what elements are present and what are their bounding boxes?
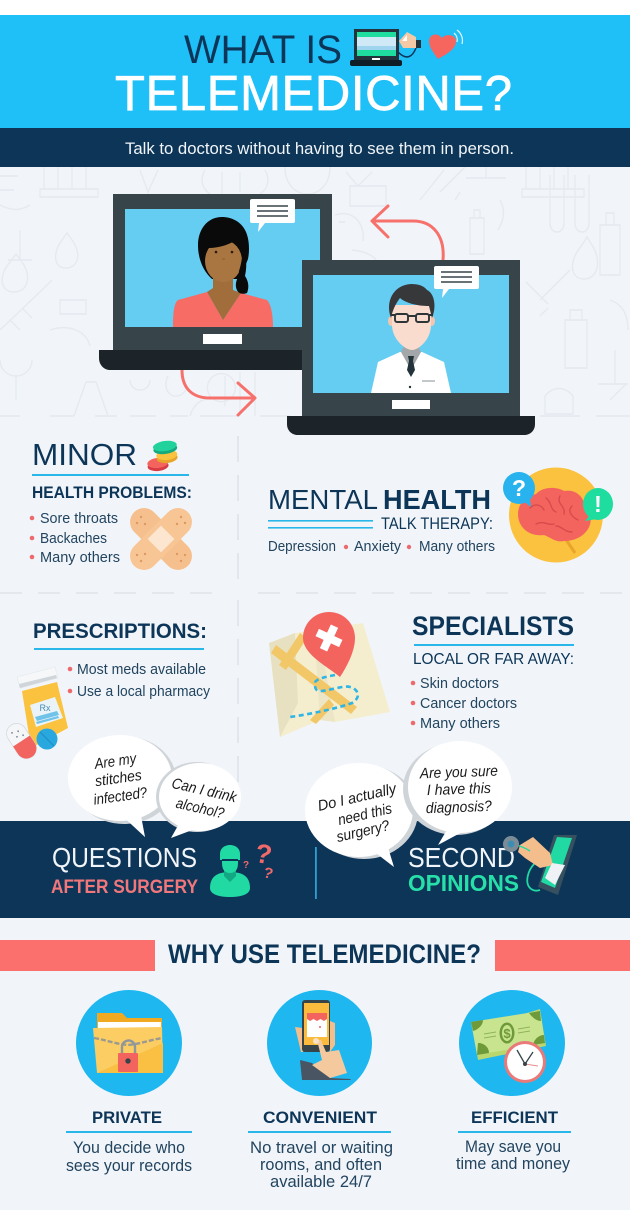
speech bubble: are my stitches infected: Are my (93, 750, 139, 773)
icon: surgeon with question marks: ? (253, 838, 274, 870)
speech bubble: are you sure I have this diagnosis: I have this (427, 780, 492, 799)
text: convenient description: available 24/7 (270, 1173, 372, 1191)
list: specialist types: Skin doctors (420, 675, 499, 692)
speech bubble: doctor (434, 266, 479, 298)
speech bubble: are you sure I have this diagnosis (403, 741, 512, 845)
laptop: doctor (287, 260, 535, 435)
speech bubble: do I actually need this surgery (305, 763, 418, 867)
panel: specialists (269, 611, 574, 737)
icon: hand holding phone (295, 1000, 351, 1080)
panel: private (66, 990, 192, 1175)
icon: pill bottle and pills: Rx (40, 703, 51, 713)
panel: convenient: CONVENIENT (263, 1108, 378, 1127)
icon: brain with question and exclamation: ? (512, 475, 526, 501)
icon: phone with hand and stethoscope (503, 835, 577, 895)
list: minor problems: Sore throats (40, 510, 118, 527)
list: mental health conditions: Many others (419, 539, 495, 555)
speech bubble: are my stitches infected: stitches (94, 767, 143, 790)
icon: surgeon with question marks (210, 838, 275, 897)
icon: brain with question and exclamation: ! (594, 491, 602, 517)
icon: pill bottle and pills (3, 667, 68, 762)
heading: mental health: HEALTH (383, 484, 491, 515)
heading: questions after surgery: AFTER SURGERY (51, 877, 198, 898)
icon: pills (147, 439, 178, 472)
list: mental health conditions (268, 539, 495, 555)
panel: efficient (456, 990, 571, 1173)
laptop: patient (99, 194, 332, 370)
background pattern of medical line icons (0, 162, 630, 416)
speech bubble: are my stitches infected (68, 735, 176, 837)
list: minor problems: Backaches (40, 530, 107, 547)
panel: efficient: EFFICIENT (471, 1108, 559, 1127)
icon: crossed bandages (124, 502, 198, 576)
heading: minor: MINOR (32, 437, 137, 472)
text: efficient description (456, 1138, 571, 1173)
speech bubble: are you sure I have this diagnosis: Are you sure (419, 763, 498, 782)
panel: mental health: TALK THERAPY: (381, 515, 493, 533)
speech bubble: can I drink alcohol (156, 762, 241, 838)
patient portrait (173, 217, 273, 327)
text: convenient description: No travel or waiting (250, 1139, 393, 1157)
panel: prescriptions (3, 620, 210, 762)
subtitle band (0, 128, 630, 167)
laptop video call illustration (99, 194, 535, 435)
text: convenient description: rooms, and often (260, 1156, 382, 1174)
arrow: patient to doctor (182, 370, 255, 415)
list: prescription points: Most meds available (77, 661, 206, 678)
icon: surgeon with question marks: ? (243, 860, 249, 871)
list: minor problems (30, 510, 120, 566)
speech bubble: are you sure I have this diagnosis: diagnosis? (426, 798, 493, 817)
section heading: why use telemedicine (0, 939, 630, 971)
icon: laptop with stethoscope and heart (350, 29, 462, 66)
text: convenient description (250, 1139, 393, 1191)
text: private description (66, 1139, 192, 1175)
text: private description: sees your records (66, 1157, 192, 1175)
list: minor problems: Many others (40, 549, 120, 566)
title: telemedicine: TELEMEDICINE? (115, 67, 512, 121)
text: efficient description: May save you (465, 1138, 561, 1156)
text: efficient description: time and money (456, 1155, 571, 1173)
icon: brain with question and exclamation (503, 468, 613, 562)
title: what is: WHAT IS (184, 28, 342, 72)
speech bubble: do I actually need this surgery: Do I actually (316, 780, 399, 815)
speech bubble: patient (250, 199, 295, 232)
heading: mental health: MENTAL (268, 484, 378, 515)
text: private description: You decide who (73, 1139, 185, 1157)
dark band: questions and second opinions (0, 735, 630, 918)
panel: minor health problems: HEALTH PROBLEMS: (32, 484, 192, 502)
speech bubble: do I actually need this surgery: surgery? (335, 817, 392, 846)
list: specialist types: Cancer doctors (420, 695, 517, 712)
list: prescription points: Use a local pharmacy (77, 683, 210, 700)
doctor portrait (371, 284, 451, 393)
icon: money and clock: $ (503, 1026, 511, 1041)
header band (0, 15, 630, 128)
speech bubble: are my stitches infected: infected? (92, 784, 149, 809)
heading: second opinions: SECOND (408, 842, 515, 873)
heading: second opinions (408, 842, 519, 896)
panel: prescriptions: PRESCRIPTIONS: (33, 620, 207, 643)
panel: minor health problems (30, 437, 198, 576)
icon: money and clock (471, 1009, 546, 1083)
list: specialist types: Many others (420, 715, 500, 732)
heading: mental health (268, 484, 491, 515)
heading: questions after surgery (51, 842, 198, 898)
panel: specialists: LOCAL OR FAR AWAY: (413, 651, 574, 668)
panel: mental health (268, 468, 613, 562)
list: prescription points (68, 661, 210, 700)
arrow: doctor to patient (372, 206, 443, 260)
icon: locked folder (93, 1013, 163, 1073)
list: mental health conditions: Anxiety (354, 539, 402, 555)
subtitle band: Talk to doctors without having to see them in person. (125, 139, 514, 158)
section heading: why use telemedicine: WHY USE TELEMEDICINE? (168, 939, 481, 969)
heading: second opinions: OPINIONS (408, 870, 519, 896)
list: mental health conditions: Depression (268, 539, 336, 555)
icon: surgeon with question marks: ? (262, 864, 275, 883)
icon: map with location pin (269, 612, 390, 737)
panel: convenient (248, 990, 393, 1191)
heading: questions after surgery: QUESTIONS (52, 842, 197, 873)
speech bubble: can I drink alcohol: alcohol? (174, 795, 226, 823)
speech bubble: do I actually need this surgery: need this (336, 800, 394, 829)
section dividers (0, 436, 630, 790)
panel: specialists: SPECIALISTS (412, 611, 574, 641)
panel: private: PRIVATE (92, 1108, 162, 1127)
list: specialist types (411, 675, 517, 732)
speech bubble: can I drink alcohol: Can I drink (170, 775, 239, 807)
